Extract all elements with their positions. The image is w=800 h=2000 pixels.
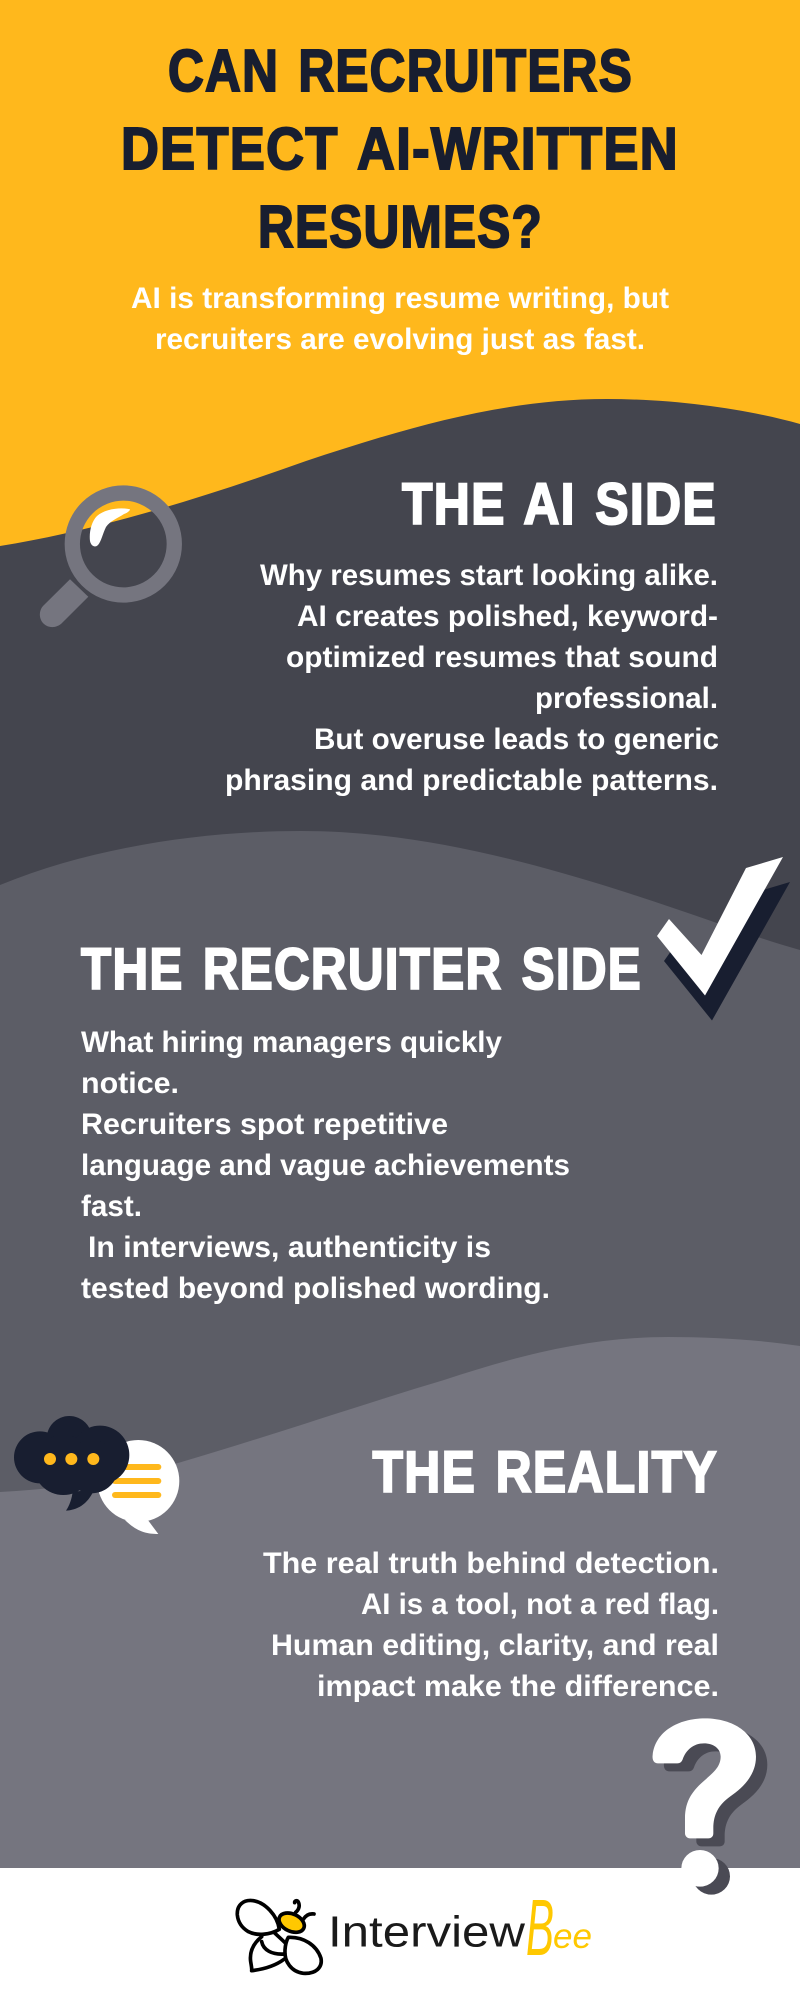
icon: check mark (657, 857, 790, 1020)
icon: bee (237, 1900, 321, 1973)
title: DETECT AI-WRITTEN (121, 116, 679, 182)
text block: the recruiter side: tested beyond polished wording. (81, 1272, 550, 1305)
subtitle: recruiters are evolving just as fast. (155, 323, 645, 356)
text block: the recruiter side: In interviews, authenticity is (88, 1231, 491, 1264)
subtitle: AI is transforming resume writing, but (131, 282, 669, 315)
icon: question mark (653, 1718, 767, 1895)
text block: the AI side: AI creates polished, keyword- (297, 600, 718, 633)
text block: the AI side (225, 559, 719, 797)
text block: the recruiter side: language and vague achievements (81, 1149, 570, 1182)
text block: the AI side: Why resumes start looking alike. (260, 559, 718, 592)
text block: the AI side: phrasing and predictable patterns. (225, 764, 718, 797)
heading: the AI side: THE AI SIDE (402, 472, 717, 537)
text block: the AI side: professional. (535, 682, 718, 715)
text block: the recruiter side: notice. (81, 1067, 179, 1100)
title (121, 38, 679, 260)
heading: the reality: THE REALITY (372, 1440, 718, 1505)
title: RESUMES? (258, 194, 543, 260)
panel: white footer (0, 1868, 800, 2000)
text block: the recruiter side (81, 1026, 570, 1305)
text block: the AI side: optimized resumes that sound (286, 641, 718, 674)
wordmark: Bee: ee (553, 1917, 592, 1956)
text block: the AI side: But overuse leads to generic (314, 723, 719, 756)
text block: the recruiter side: fast. (81, 1190, 142, 1223)
wordmark: Bee: B (526, 1883, 554, 1972)
wordmark: Interview: Interview (328, 1908, 525, 1956)
subtitle (131, 282, 669, 356)
title: CAN RECRUITERS (168, 38, 633, 104)
text block: the recruiter side: What hiring managers quickly (81, 1026, 502, 1059)
panel: the recruiter side wave (0, 831, 800, 2000)
text block: the recruiter side: Recruiters spot repetitive (81, 1108, 448, 1141)
logo: InterviewBee (237, 1883, 592, 1973)
text block: the reality: Human editing, clarity, and real (271, 1629, 719, 1662)
text block: the reality (263, 1547, 719, 1703)
panel: the reality wave (0, 1337, 800, 2000)
icon: speech bubbles (14, 1416, 179, 1534)
text block: the reality: impact make the difference. (317, 1670, 719, 1703)
text block: the reality: AI is a tool, not a red flag. (361, 1588, 719, 1621)
heading: the recruiter side: THE RECRUITER SIDE (81, 937, 642, 1002)
icon: magnifying glass (40, 493, 174, 627)
text block: the reality: The real truth behind detection. (263, 1547, 719, 1580)
